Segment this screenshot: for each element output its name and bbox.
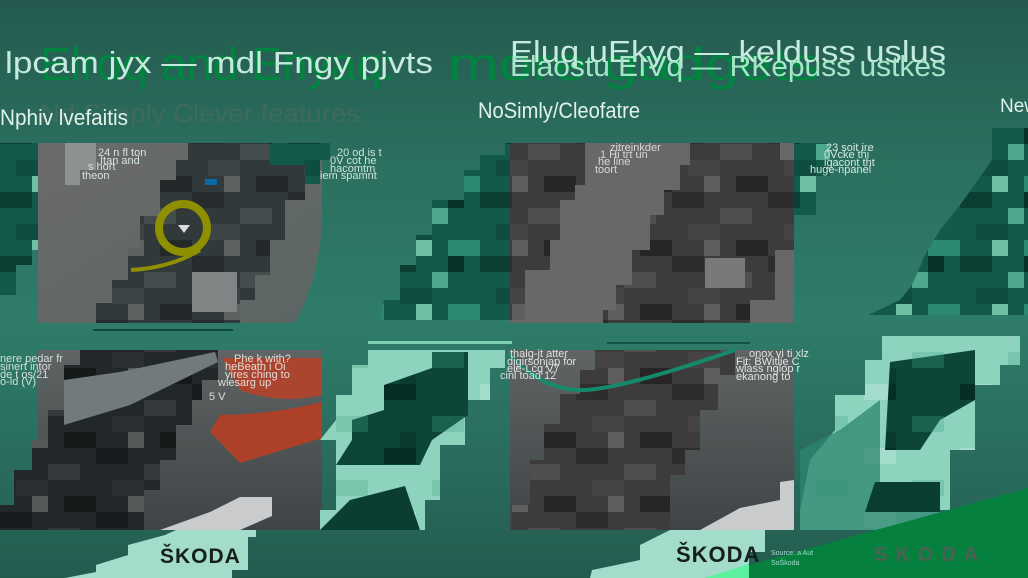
caption: panel three left: de t os/21	[0, 369, 48, 381]
subtitle middle: NoSimly/Cleofatre	[478, 98, 640, 123]
photo: orange hand upper	[222, 358, 322, 399]
photo: light highlight	[192, 272, 237, 312]
panel: photo top right	[510, 143, 794, 323]
strip: bright band above bottom swirl	[368, 341, 512, 344]
green accent	[705, 564, 749, 578]
caption: panel three right: 5 V	[209, 391, 226, 403]
caption: panel two left: zitreinkder	[610, 142, 661, 154]
photo: light corner detail	[38, 143, 96, 185]
caption: panel two left: toort	[595, 164, 617, 176]
caption: panel two right	[810, 142, 875, 176]
photo: light stripes	[64, 352, 218, 425]
photo: white slope	[160, 497, 272, 530]
caption: panel four left: digirsonjap for	[507, 356, 576, 368]
panel: top left swirl	[0, 143, 510, 320]
caption: panel four left	[500, 348, 576, 382]
caption: panel two left	[595, 142, 661, 176]
caption: panel three right	[209, 353, 291, 403]
caption: panel two right: 0Vcke thi	[824, 149, 869, 161]
title light left: lpcam jyx — mdl Fngy pjvts	[5, 45, 433, 80]
photo: green swoosh	[510, 350, 735, 390]
caption: panel one left: Itan and	[100, 155, 140, 167]
caption: panel one left: theon	[82, 170, 110, 182]
caption: panel four left: ele-Lcq V7	[507, 363, 560, 375]
caption: panel three right: wlesarg up	[217, 377, 271, 389]
caption: panel two left: 1 Hi trt un	[600, 149, 648, 161]
caption: panel three right: Phe k with?	[234, 353, 291, 365]
icon: blue port marker	[205, 179, 217, 185]
icon: yellow highlight ring	[131, 204, 207, 270]
photo: dark interior mosaic	[603, 143, 794, 323]
caption: panel three left: sinert intor	[0, 361, 52, 373]
caption: panel one left: s hort	[88, 161, 116, 173]
panel: photo bottom right	[510, 350, 794, 530]
caption: panel three left	[0, 353, 63, 388]
photo: dark interior mosaic	[0, 350, 218, 530]
caption: panel one left: 24 n fl ton	[98, 147, 146, 159]
caption: panel one right: 0V cot he	[330, 155, 376, 167]
caption: panel three left: o-ld (V)	[0, 376, 36, 388]
caption: panel three left: nere pedar fr	[0, 353, 63, 365]
caption: panel four right: wlass nglop r	[735, 363, 801, 375]
caption: panel three right: heBeath i Oi	[225, 361, 286, 373]
caption: panel two right: igacont tht	[824, 157, 875, 169]
caption: panel three right: vires ching to	[225, 369, 290, 381]
footer mint band left	[65, 530, 256, 578]
caption: panel four left: thalg-jt atter	[510, 348, 568, 360]
source note: Source: a Aut	[771, 550, 813, 557]
caption: panel four right: onox vi ti xlz	[749, 348, 809, 360]
green corner wedge	[705, 488, 1028, 578]
photo: dark interior mosaic	[512, 350, 735, 530]
caption: panel two left: he line	[598, 156, 630, 168]
title light right lower: Elaostu EIVq — RKepuss ustkes	[510, 51, 946, 83]
logo: SKODA wordmark centre: ŠKODA	[676, 542, 760, 567]
photo: white slope	[700, 480, 794, 530]
photo: mint swirl corner	[270, 143, 330, 184]
logo: SKODA wordmark corner: SKODA	[874, 544, 986, 566]
caption: panel two right: 23 soit ire	[826, 142, 874, 154]
caption: panel four right: ekanong to	[736, 371, 790, 383]
strip: dark band above bottom photo	[607, 342, 750, 344]
subtitle green: Nd Simply Clever features	[40, 100, 360, 128]
caption: panel one right: 20 od is t	[337, 147, 382, 159]
panel: photo bottom left	[0, 350, 322, 530]
logo: SKODA wordmark left: ŠKODA	[160, 544, 241, 568]
panel: mint swirl bottom right	[800, 336, 1020, 530]
strip: dark band below top left photo	[93, 329, 233, 331]
title green right: more gadgets	[448, 38, 820, 90]
caption: panel four right	[735, 348, 809, 383]
caption: panel one right: iem spamnt	[320, 170, 377, 182]
title light right upper: Eluq uEkyq — kelduss uslus	[510, 34, 946, 69]
photo: light mosaic left	[510, 143, 585, 320]
footer mint band right	[590, 530, 765, 578]
caption: panel one left	[82, 147, 146, 182]
photo: dark interior mosaic	[96, 143, 305, 323]
panel: photo top left	[38, 143, 330, 323]
source note second line: SoŠkoda	[771, 558, 800, 567]
caption: panel two right: huge-npanel	[810, 164, 871, 176]
icon: white arrow tag	[178, 225, 190, 233]
subtitle left: Nphiv lvefaitis	[0, 105, 128, 130]
caption: panel one right: hacomtm	[330, 163, 375, 175]
caption: panel one right	[320, 147, 382, 182]
caption: panel four left: cinl toad 12	[500, 370, 556, 382]
panel: mint swirl bottom left	[320, 350, 505, 530]
photo: orange hand lower	[210, 402, 322, 463]
photo: highlight	[705, 258, 745, 288]
caption: panel four right: Fit: BWitlie C	[736, 356, 800, 368]
panel: right swirls top	[794, 128, 1028, 315]
title green left: Elroq and Enyaq:	[40, 38, 395, 90]
